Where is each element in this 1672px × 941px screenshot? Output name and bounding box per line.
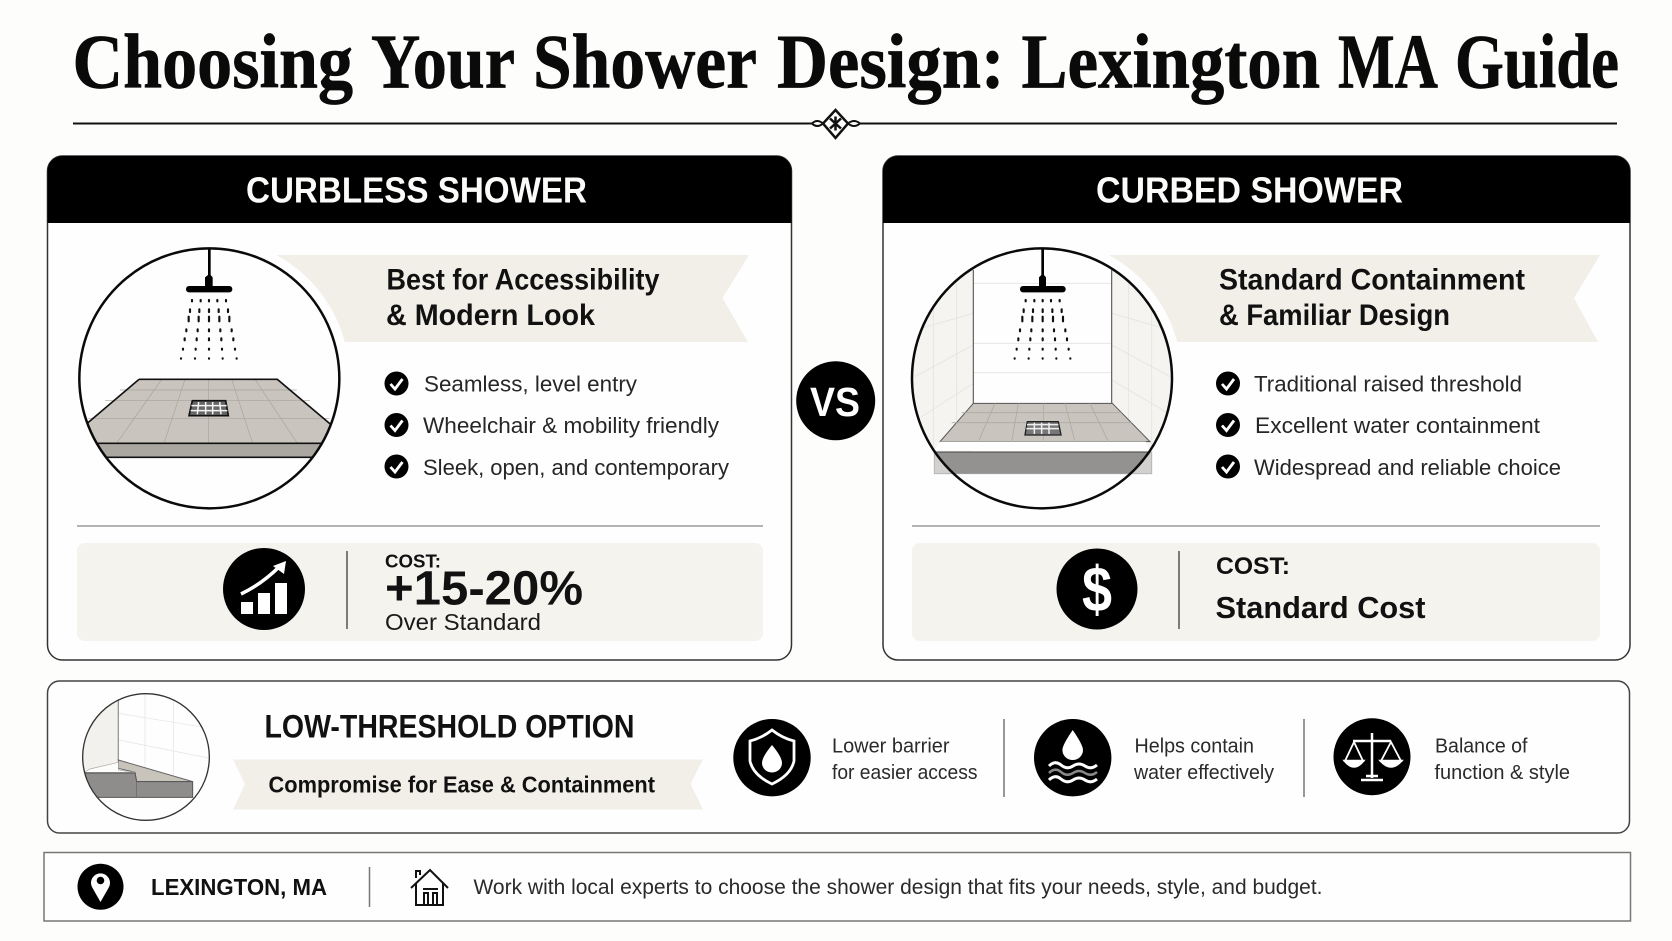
low-threshold illustration (80, 692, 213, 825)
curbed benefit list: Excellent water containment (1255, 413, 1540, 438)
curbless benefit list: Seamless, level entry (424, 372, 637, 396)
curbed heading: CURBED SHOWER (1096, 170, 1403, 210)
title: Design: (777, 18, 1004, 104)
curbless ribbon (209, 255, 749, 342)
curbed benefit list: Traditional raised threshold (1254, 372, 1522, 396)
title rule with ornament (73, 110, 1617, 138)
icon: drop and waves (1034, 719, 1111, 796)
panel: curbless shower (48, 156, 792, 660)
curbless cost text (385, 550, 583, 635)
curbed subheading (1219, 264, 1525, 332)
curbless header bar (48, 156, 792, 223)
title: Choosing (72, 18, 353, 104)
panel: curbed shower (883, 156, 1630, 660)
low-threshold ribbon (233, 760, 703, 810)
feature: balance: Balance of (1435, 734, 1528, 758)
title: Guide (1455, 18, 1619, 104)
curbed cost box (912, 543, 1600, 641)
feature: helps contain: water effectively (1133, 761, 1275, 784)
title: Shower (533, 18, 757, 104)
icon: location pin (78, 864, 124, 910)
curbed subheading: & Familiar Design (1219, 299, 1450, 332)
curbless subheading: & Modern Look (386, 299, 596, 332)
VS badge (796, 361, 875, 440)
icon: house (411, 870, 448, 905)
curbed illustration (910, 247, 1178, 510)
curbless cost box (77, 543, 763, 641)
curbed ribbon (1042, 255, 1600, 342)
footer bar (44, 852, 1630, 921)
curbed cost text (1216, 553, 1426, 625)
feature: balance: function & style (1434, 761, 1570, 784)
curbless illustration (78, 247, 345, 510)
curbed cost text: Standard Cost (1216, 590, 1426, 625)
title: MA (1338, 18, 1438, 104)
title: Your (371, 18, 515, 104)
curbless subheading: Best for Accessibility (386, 264, 660, 296)
feature: balance (1434, 734, 1570, 784)
title: Lexington (1022, 18, 1320, 104)
curbless heading: CURBLESS SHOWER (246, 170, 587, 210)
footer message: Work with local experts to choose the shower design that fits your needs, style, and budget. (474, 876, 1322, 899)
curbless subheading (386, 264, 660, 332)
low-threshold tagline: Compromise for Ease & Containment (268, 772, 655, 798)
title (72, 18, 1619, 104)
low-threshold heading: LOW-THRESHOLD OPTION (264, 708, 634, 744)
curbless benefit list (384, 372, 729, 480)
icon: dollar (1056, 548, 1138, 630)
curbless cost text: +15-20% (385, 562, 583, 616)
curbless benefit list: Wheelchair & mobility friendly (423, 413, 719, 438)
icon: rising cost chart (223, 548, 305, 630)
feature: helps contain (1133, 734, 1275, 784)
icon: dollar: $ (1082, 553, 1112, 625)
feature: helps contain: Helps contain (1134, 734, 1254, 758)
curbless benefit list: Sleek, open, and contemporary (423, 455, 729, 480)
feature: lower barrier: for easier access (832, 761, 978, 784)
feature: lower barrier: Lower barrier (832, 734, 950, 758)
curbed subheading: Standard Containment (1219, 264, 1525, 296)
curbed benefit list: Widespread and reliable choice (1254, 455, 1561, 480)
icon: shield with drop (733, 719, 811, 796)
curbless cost text: COST: (385, 550, 441, 572)
curbless cost text: Over Standard (385, 609, 541, 635)
curbed cost text: COST: (1216, 553, 1290, 580)
feature: lower barrier (832, 734, 978, 784)
curbed benefit list (1216, 372, 1561, 480)
panel: low-threshold option (48, 681, 1630, 833)
icon: balance scales (1334, 718, 1410, 795)
location label: LEXINGTON, MA (151, 874, 327, 900)
VS badge: VS (810, 379, 860, 425)
curbed header bar (883, 156, 1630, 223)
